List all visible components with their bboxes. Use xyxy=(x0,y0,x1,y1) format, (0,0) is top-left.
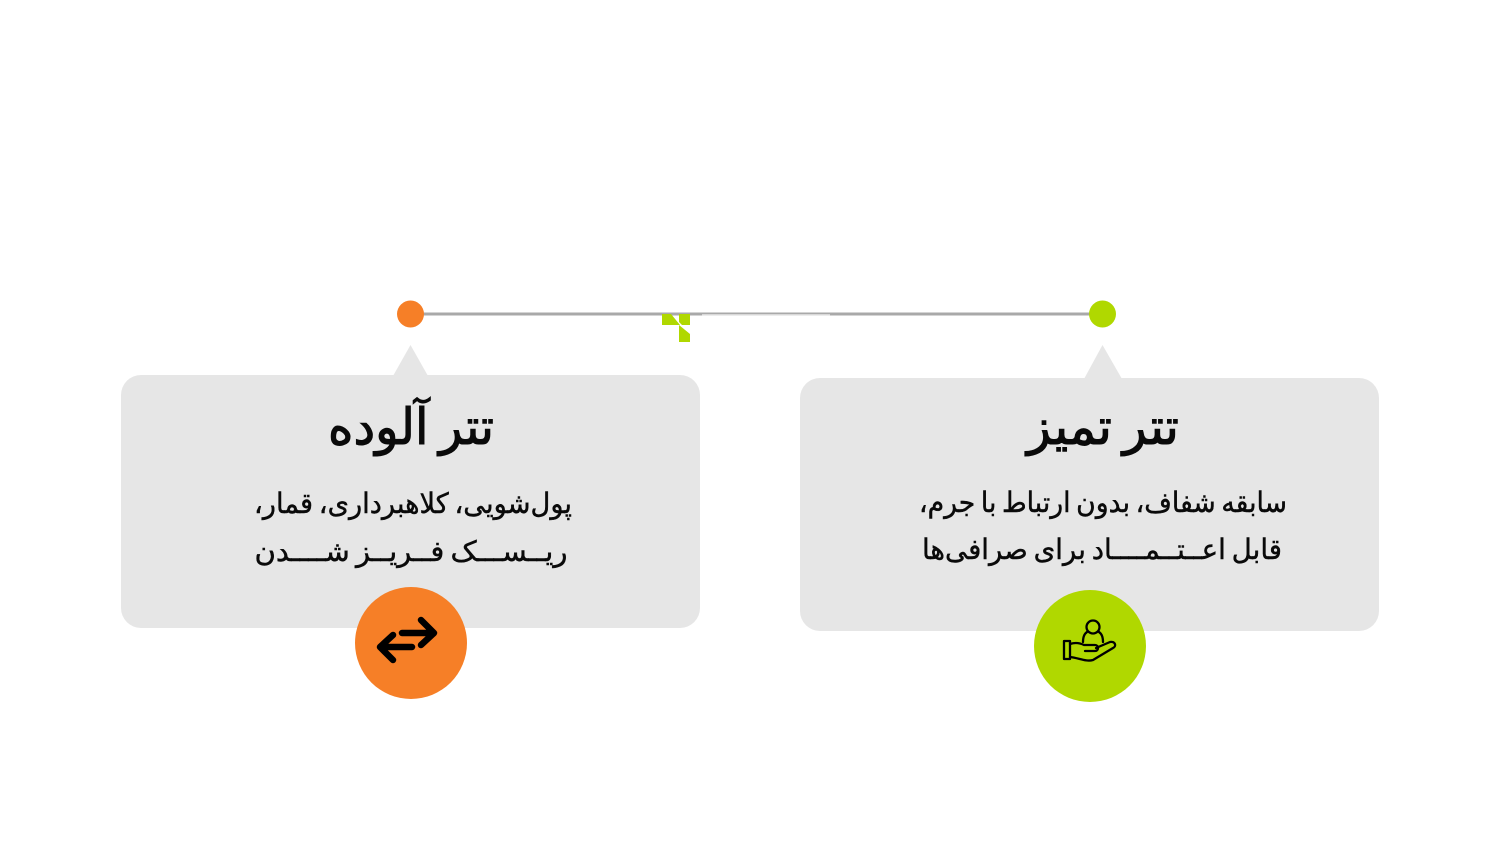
text line 2: ریــســـک فــریــز شــــدن xyxy=(254,535,568,568)
timeline dot: green xyxy=(1089,300,1116,328)
text line 2: قابل اعــتــمــــاد برای صرافی‌ها xyxy=(922,533,1282,566)
hand and person xyxy=(1064,620,1115,661)
panel background xyxy=(800,378,1379,631)
panel: clean tether xyxy=(800,345,1379,631)
icon: orange exchange arrows xyxy=(355,587,467,699)
heading: clean tether: تتر تمیز xyxy=(1024,398,1179,456)
panel background xyxy=(121,375,700,628)
text line 1: سابقه شفاف، بدون ارتباط با جرم، xyxy=(919,486,1287,519)
heading: dirty tether: تتر آلوده xyxy=(328,397,494,456)
panel: dirty tether xyxy=(121,345,700,628)
arrows xyxy=(380,620,434,660)
timeline connector line xyxy=(411,312,1102,316)
orange circle xyxy=(355,587,467,699)
icon: green logo mark xyxy=(662,314,690,342)
panel pointer xyxy=(1084,345,1122,379)
text line 1: پول‌شویی، کلاهبرداری، قمار، xyxy=(254,487,572,520)
green circle xyxy=(1034,590,1146,702)
icon: green hand holding person xyxy=(1034,590,1146,702)
panel pointer xyxy=(393,345,428,376)
white logo text smudge over line xyxy=(702,314,830,318)
timeline dot: orange xyxy=(397,300,424,328)
